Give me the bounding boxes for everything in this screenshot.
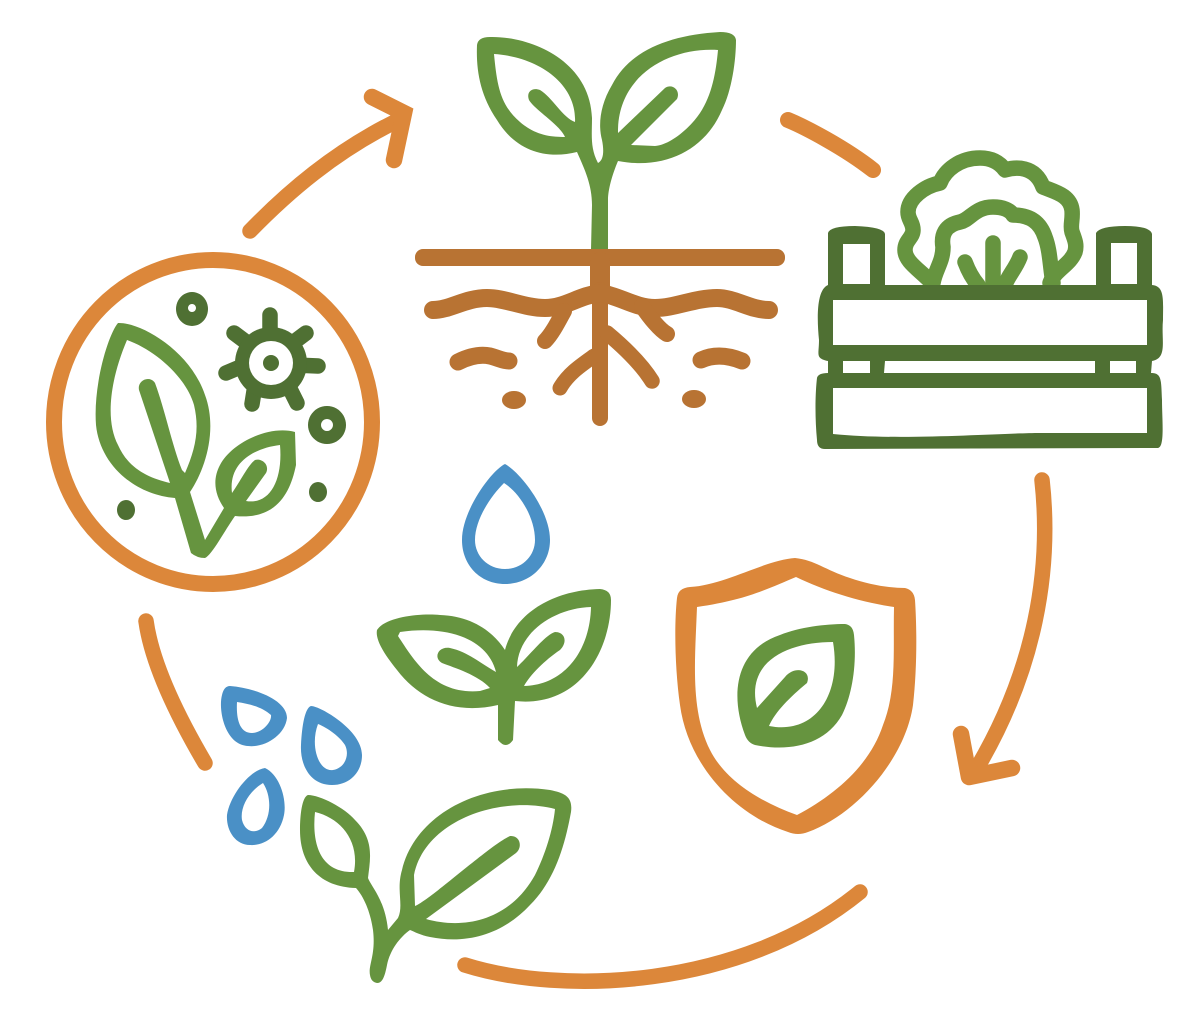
arrow: crate to shield [961, 480, 1045, 777]
leaf sprig [96, 323, 296, 558]
shield [675, 558, 916, 834]
icon: crate of lettuce [816, 158, 1163, 449]
arrow: seedling to crate [788, 120, 873, 170]
icon: circle with leaf and microbes [54, 260, 372, 584]
sprout [477, 32, 736, 250]
icon: centre plant [377, 589, 611, 745]
arrow: shield to branch [465, 892, 860, 981]
roots [433, 262, 769, 418]
icon: seedling with roots [415, 32, 785, 418]
arrow: microbes to seedling [250, 97, 404, 231]
branch [300, 788, 571, 983]
spores [117, 292, 346, 520]
soil line [415, 249, 785, 266]
icon: water drop [462, 464, 550, 584]
crate [816, 226, 1163, 449]
leaf [737, 624, 855, 747]
lettuce [905, 158, 1076, 285]
microbe [226, 315, 318, 404]
droplets [221, 686, 362, 845]
soil pebbles [502, 390, 706, 409]
icon: branch with droplets [221, 686, 571, 983]
icon: shield with leaf [675, 558, 916, 834]
ring [54, 260, 372, 584]
arrow: branch to microbes [146, 621, 205, 763]
